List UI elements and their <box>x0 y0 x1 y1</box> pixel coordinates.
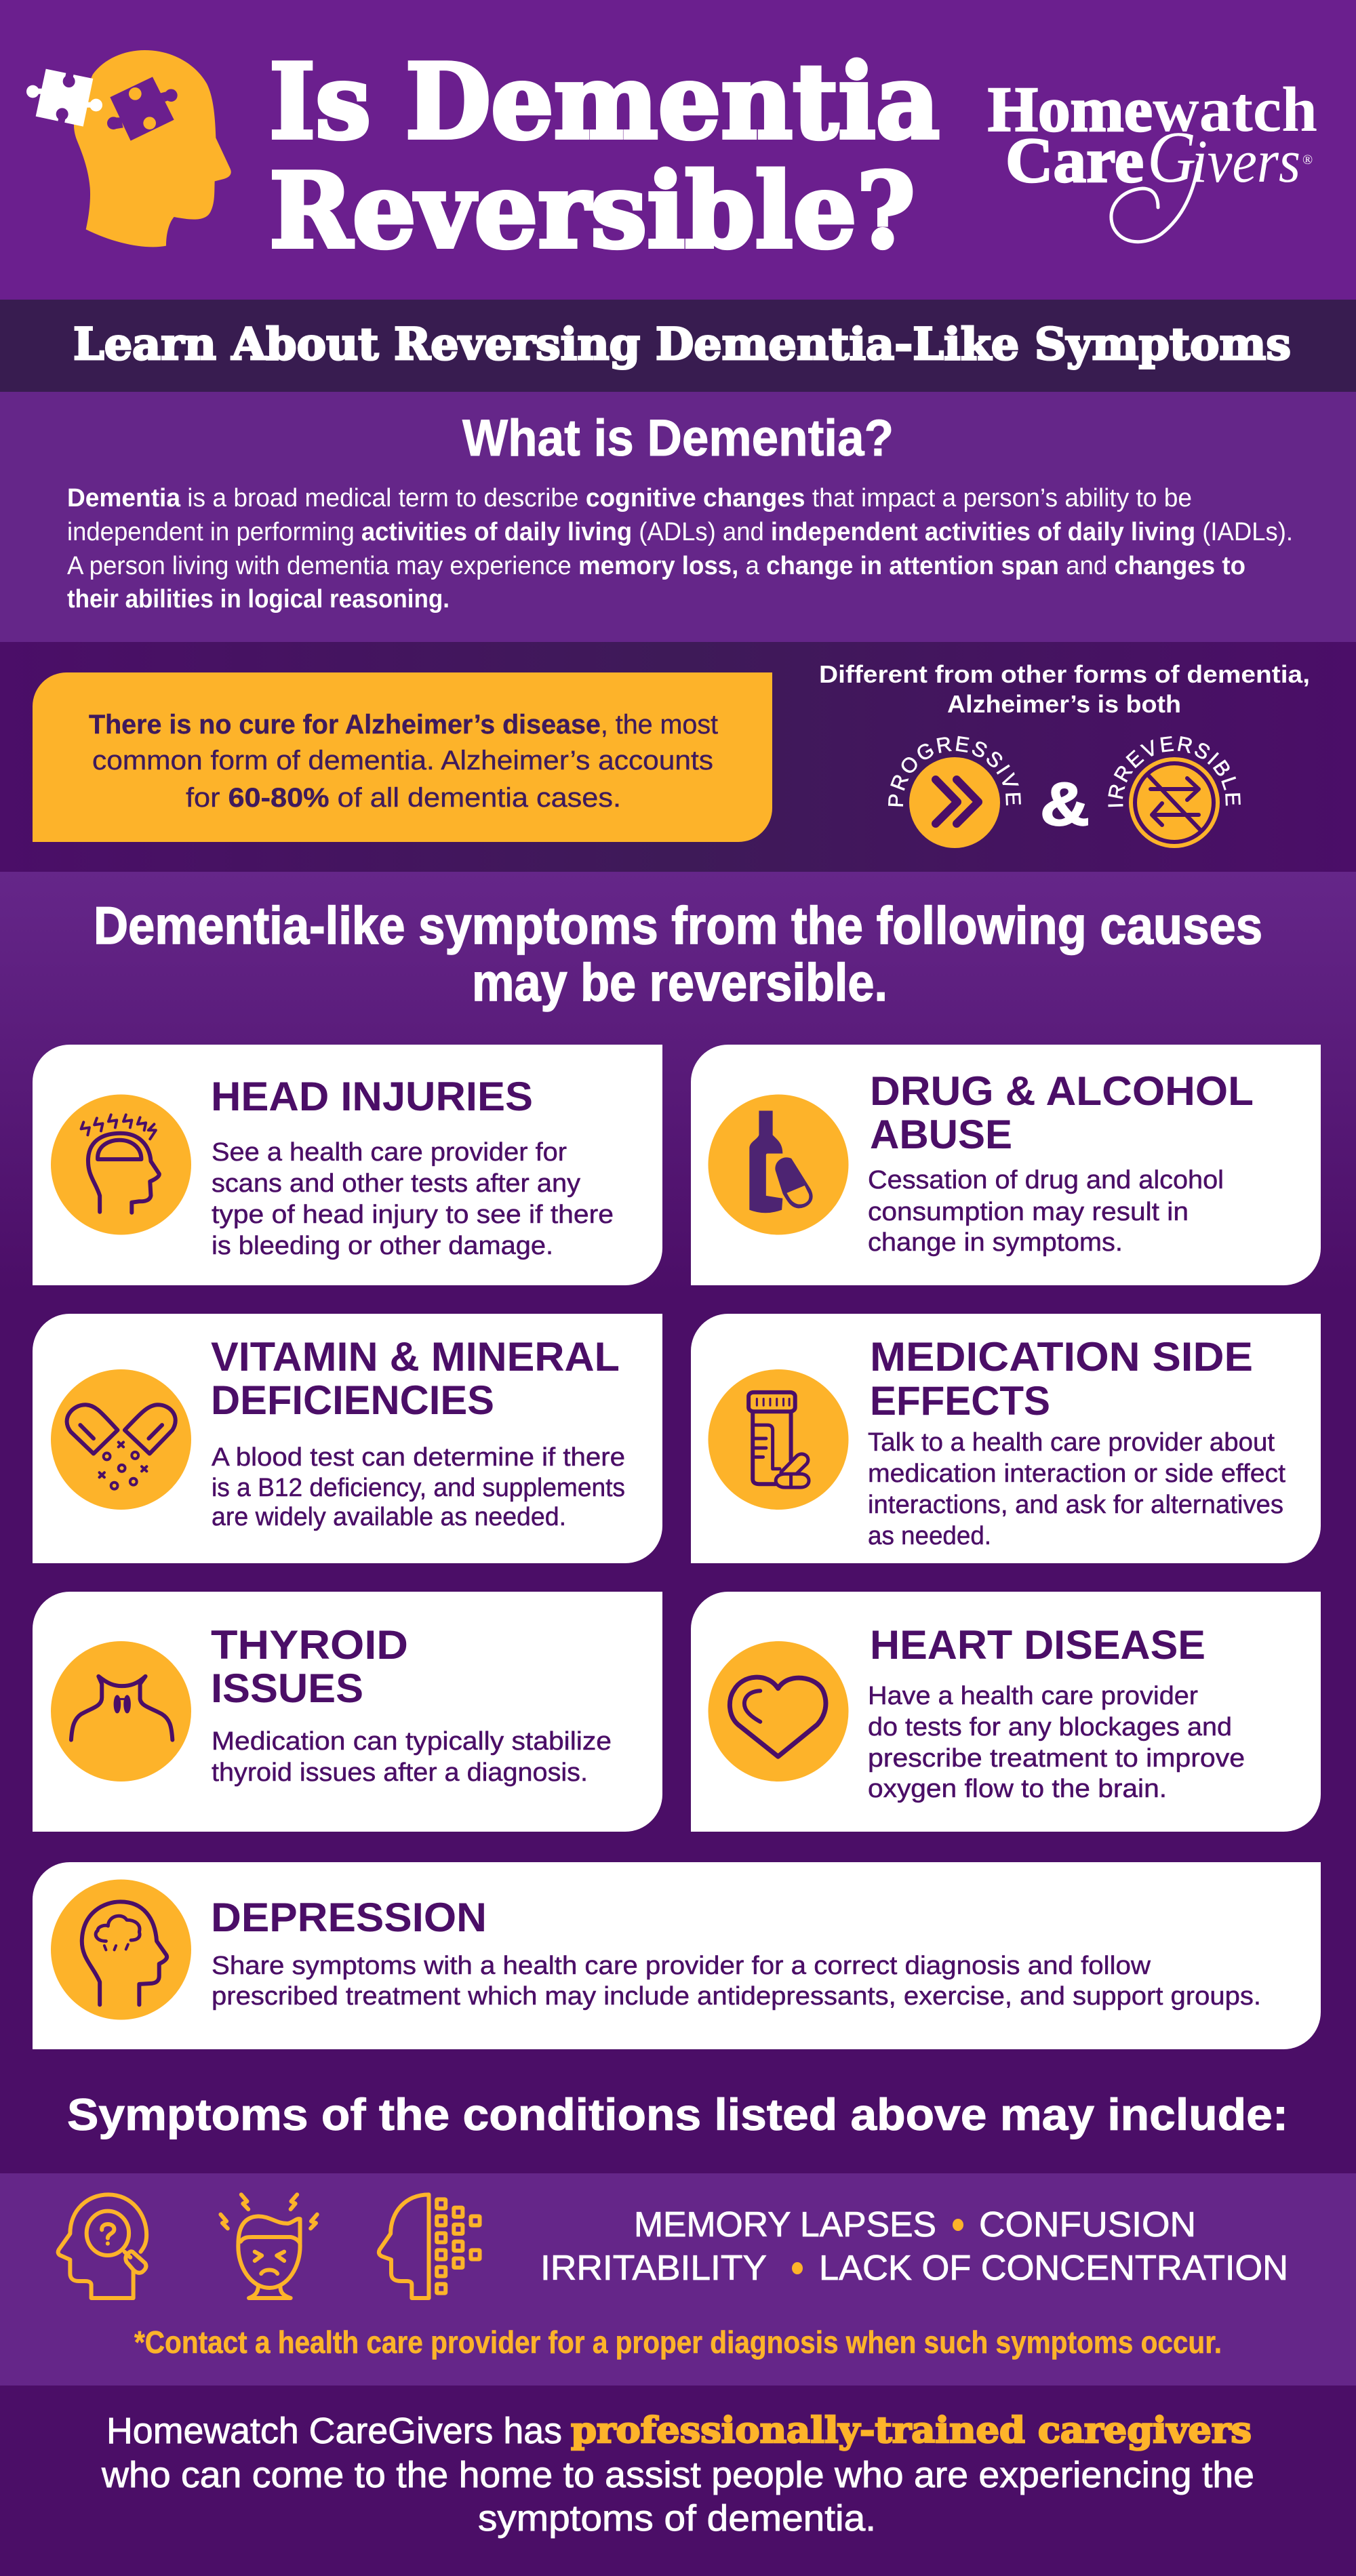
icon: irreversible <box>1108 736 1241 848</box>
card: heart disease: do tests for any blockages and <box>868 1713 1232 1742</box>
card: depression <box>33 1862 1321 2049</box>
icon: bottle and pill <box>749 1110 814 1213</box>
heading: dementia-like symptoms: may be reversible. <box>472 952 888 1012</box>
ampersand: & <box>1040 771 1090 839</box>
card: depression: DEPRESSION <box>211 1895 487 1940</box>
card: vitamin and mineral deficiencies: A blood test can determine if there <box>212 1443 625 1472</box>
card: thyroid issues: thyroid issues after a diagnosis. <box>212 1758 588 1787</box>
text block: dementia definition: Dementia is a broad medical term to describe cognitive changes that impact a person’s ability to be <box>67 484 1192 512</box>
icon: neck and thyroid <box>71 1676 172 1740</box>
text block: symptom list: IRRITABILITY <box>540 2249 767 2288</box>
panel: causes background <box>0 872 1356 1292</box>
logo: Homewatch CareGivers: Care <box>1005 125 1144 196</box>
card: vitamin and mineral deficiencies: VITAMIN & MINERAL <box>211 1334 620 1380</box>
title: Is Dementia <box>269 41 940 162</box>
card: vitamin and mineral deficiencies: is a B12 deficiency, and supplements <box>212 1474 625 1502</box>
callout: no cure: There is no cure for Alzheimer’s disease, the most <box>89 710 718 740</box>
card: head injuries: HEAD INJURIES <box>211 1074 533 1119</box>
banner: subtitle: Learn About Reversing Dementia-Like Symptoms <box>73 319 1291 370</box>
text block: symptom list <box>540 2205 1288 2288</box>
card: head injuries <box>33 1045 662 1285</box>
text block: different from other forms <box>819 660 1310 718</box>
card: heart disease: prescribe treatment to improve <box>868 1744 1245 1773</box>
text block: closing statement: Homewatch CareGivers has <box>106 2411 562 2451</box>
card: drug and alcohol abuse: ABUSE <box>870 1112 1012 1157</box>
card: head injuries: scans and other tests after any <box>212 1169 580 1198</box>
icon: head with puzzle piece <box>26 50 231 247</box>
card: thyroid issues: ISSUES <box>211 1666 363 1711</box>
icon: head with lightning <box>81 1114 159 1213</box>
card: medication side effects: Talk to a health care provider about <box>868 1428 1275 1457</box>
panel: symptoms <box>0 2173 1356 2386</box>
text block: closing statement: who can come to the home to assist people who are experiencing the <box>101 2455 1254 2495</box>
card: head injuries: See a health care provider for <box>212 1138 567 1167</box>
card: head injuries: type of head injury to see if there <box>212 1201 614 1229</box>
card: drug and alcohol abuse: DRUG & ALCOHOL <box>870 1068 1254 1114</box>
text block: dementia definition: independent in performing activities of daily living (ADLs) and independent activities of daily living (IADLs). <box>67 518 1293 546</box>
card: vitamin and mineral deficiencies: are widely available as needed. <box>212 1503 566 1531</box>
text block: dementia definition: A person living with dementia may experience memory loss, a change in attention span and changes to <box>67 552 1245 580</box>
logo: Homewatch CareGivers: Homewatch <box>988 75 1317 145</box>
logo: Homewatch CareGivers: G <box>1147 117 1196 198</box>
text block: closing statement <box>101 2410 1254 2539</box>
icon: medicine bottle <box>749 1392 809 1487</box>
icon: progressive: PROGRESSIVE <box>888 736 1021 807</box>
text block: closing statement: professionally-trained caregivers <box>571 2410 1252 2451</box>
callout: no cure <box>33 672 772 842</box>
card: thyroid issues <box>33 1592 662 1832</box>
icon: heart <box>730 1677 826 1756</box>
card: medication side effects: as needed. <box>868 1522 991 1550</box>
card: drug and alcohol abuse: Cessation of drug and alcohol <box>868 1166 1224 1194</box>
text block: symptom list: CONFUSION <box>979 2205 1196 2245</box>
text block: dementia definition <box>67 484 1293 613</box>
callout: no cure: for 60-80% of all dementia cases. <box>186 783 621 813</box>
card: medication side effects <box>691 1314 1321 1563</box>
card: medication side effects: MEDICATION SIDE <box>870 1334 1253 1380</box>
card: thyroid issues: THYROID <box>211 1622 408 1668</box>
text block: closing statement: symptoms of dementia. <box>478 2498 876 2539</box>
callout: no cure: common form of dementia. Alzheimer’s accounts <box>92 746 713 776</box>
panel: what is dementia <box>0 392 1356 642</box>
card: medication side effects: interactions, and ask for alternatives <box>868 1491 1283 1519</box>
banner: subtitle <box>0 300 1356 392</box>
heading: dementia-like symptoms: Dementia-like symptoms from the following causes <box>94 895 1262 955</box>
text block: dementia definition: their abilities in logical reasoning. <box>67 585 450 613</box>
card: heart disease: HEART DISEASE <box>870 1622 1205 1668</box>
panel: header <box>0 0 1356 300</box>
card: vitamin and mineral deficiencies: DEFICIENCIES <box>211 1377 494 1423</box>
card: depression: prescribed treatment which may include antidepressants, exercise, and support groups. <box>212 1982 1261 2011</box>
heading: what is dementia: What is Dementia? <box>462 409 894 467</box>
icon: irritated face <box>220 2194 317 2298</box>
heading: symptoms of the conditions: Symptoms of the conditions listed above may include: <box>67 2089 1288 2139</box>
icon: half head with blocks <box>379 2194 480 2298</box>
text block: different from other forms: Alzheimer’s is both <box>947 690 1181 718</box>
icon: capsules and dots <box>67 1405 176 1489</box>
card: drug and alcohol abuse: change in symptoms. <box>868 1228 1123 1257</box>
logo: Homewatch CareGivers: ® <box>1302 153 1313 167</box>
card: heart disease: oxygen flow to the brain. <box>868 1775 1167 1803</box>
heading: dementia-like symptoms <box>94 895 1262 1012</box>
logo: Homewatch CareGivers <box>988 75 1317 242</box>
card: medication side effects: medication interaction or side effect <box>868 1460 1285 1488</box>
text block: symptom list: MEMORY LAPSES <box>634 2205 936 2245</box>
title: Reversible? <box>269 150 915 271</box>
panel: alzheimer's <box>33 642 1310 872</box>
card: heart disease <box>691 1592 1321 1832</box>
card: vitamin and mineral deficiencies <box>33 1314 662 1563</box>
logo: Homewatch CareGivers: ivers <box>1192 128 1300 195</box>
card: drug and alcohol abuse <box>691 1045 1321 1285</box>
icon: head with rain cloud <box>82 1901 167 2005</box>
text block: different from other forms: Different from other forms of dementia, <box>819 660 1310 688</box>
card: drug and alcohol abuse: consumption may result in <box>868 1198 1189 1226</box>
title <box>269 41 940 271</box>
icon: irreversible: IRREVERSIBLE <box>1108 736 1241 807</box>
icon: head with magnifier <box>58 2194 146 2298</box>
card: head injuries: is bleeding or other damage. <box>212 1232 553 1260</box>
text block: symptom list: LACK OF CONCENTRATION <box>819 2249 1288 2288</box>
note: contact a provider: *Contact a health care provider for a proper diagnosis when such symptoms occur. <box>134 2325 1222 2360</box>
card: depression: Share symptoms with a health care provider for a correct diagnosis and follow <box>212 1952 1151 1980</box>
card: medication side effects: EFFECTS <box>870 1378 1050 1424</box>
card: heart disease: Have a health care provider <box>868 1682 1198 1710</box>
card: thyroid issues: Medication can typically stabilize <box>212 1727 612 1756</box>
icon: progressive <box>888 736 1021 848</box>
